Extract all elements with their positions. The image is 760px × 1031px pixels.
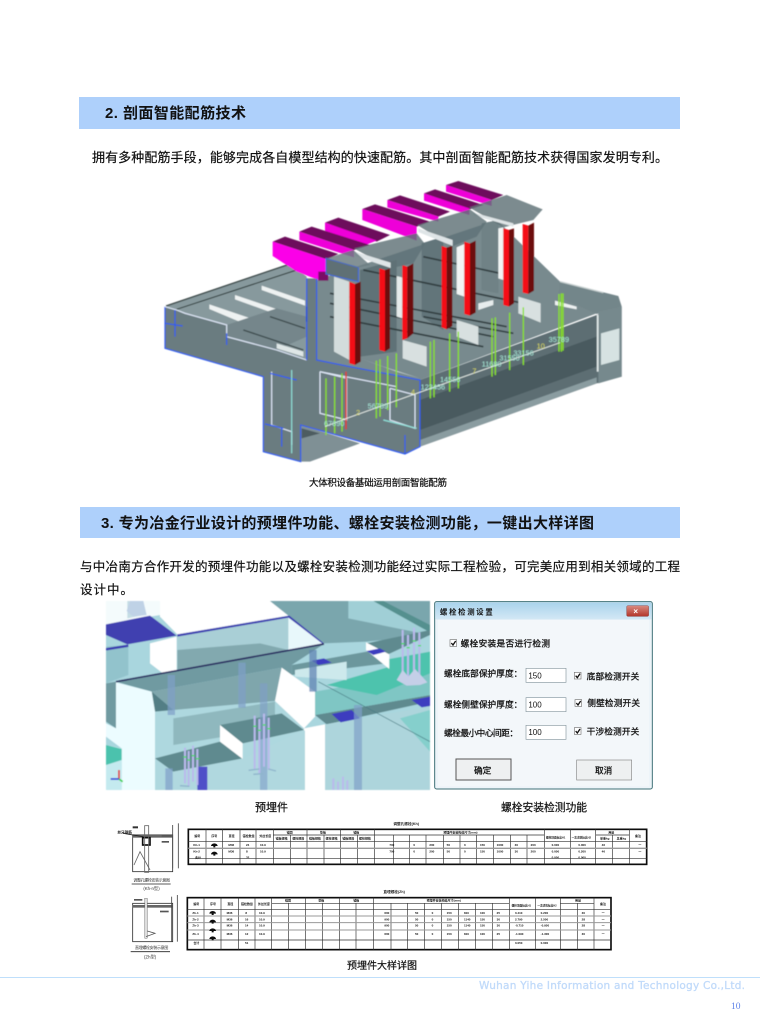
table 2: 810 — [464, 932, 469, 936]
section sketch 1: 丝牙钢筋 — [117, 830, 132, 835]
right exterior face — [301, 307, 622, 462]
table 2: 螺栓顶面标高H1 — [512, 903, 532, 907]
table 2: 0 — [432, 924, 434, 928]
table 1: 46 — [602, 850, 605, 854]
table 1: 编号 — [194, 833, 200, 838]
table 1: 0.000 — [578, 856, 586, 860]
button: confirm: 确定 — [474, 764, 492, 775]
table 2: 14 — [245, 924, 249, 928]
table 2: 50 — [415, 911, 419, 915]
table 2: 50 — [415, 932, 419, 936]
table 1: 200 — [531, 843, 536, 847]
stepped ledges — [155, 630, 430, 790]
table 1: 预埋件安装构造尺寸(mm) — [443, 830, 477, 835]
table 2: 一 — [602, 917, 605, 921]
table 1: 一次浇筑标高H2 — [572, 835, 592, 839]
table 2: Zh-1 — [192, 911, 199, 915]
table 2: 100 — [480, 932, 485, 936]
table 2: 28 — [582, 917, 585, 921]
left floor area — [165, 264, 307, 360]
table 1: 0.200 — [578, 850, 586, 854]
table 2: 30 — [497, 917, 500, 921]
table 2: 用量 — [575, 898, 581, 903]
table 2 — [187, 889, 611, 950]
table 2: 50 — [415, 917, 419, 921]
table 2: 一 — [602, 932, 605, 936]
setting row: min spacing: 干涉检测开关 — [587, 725, 640, 736]
table 2: 150 — [447, 911, 452, 915]
table 2: 50 — [415, 924, 419, 928]
table 1: 30 — [515, 850, 518, 854]
table 1: 螺栓顶面标高H1 — [546, 835, 566, 839]
setting row: bottom cover — [444, 668, 640, 682]
table 2: 外丝长度 — [258, 901, 270, 906]
table 1: 垫板 — [320, 830, 326, 835]
table 2: -1.300 — [541, 932, 549, 936]
table 1: 总重kg — [617, 835, 626, 840]
table 1: 200 — [429, 843, 435, 847]
table 1: 1000 — [497, 850, 504, 854]
caption: bolt detection: 螺栓安装检测功能 — [501, 800, 587, 814]
intro text: section 2: 拥有多种配筋手段，能够完成各自模型结构的快速配筋。其中剖面智能配筋技术获得国家发明专利。 — [92, 150, 668, 165]
bar dimension labels: 56789 — [368, 402, 388, 411]
table 1: 0 — [413, 850, 415, 854]
table 2: 编号 — [193, 901, 199, 906]
footer: rule and company name: Wuhan Yihe Information and Technology Co.,Ltd. — [479, 980, 745, 992]
table 2: 10.9 — [259, 911, 265, 915]
light columns — [334, 227, 541, 367]
bar dimension labels: 123456 — [421, 382, 445, 391]
dialog title bar: × — [633, 607, 638, 616]
table 2: 锚栓数量 — [241, 901, 253, 906]
table 1: 调整孔螺栓(Kh) — [393, 821, 420, 826]
table 1: 200 — [429, 850, 435, 854]
table 1: 700 — [389, 843, 395, 847]
table 1: 10.9 — [260, 850, 266, 854]
table 2: -0.710 — [515, 924, 524, 928]
button: cancel: 取消 — [595, 764, 613, 775]
table 2: 30 — [582, 911, 585, 915]
table 2: 150 — [447, 924, 452, 928]
table 2: 600 — [384, 932, 390, 936]
table 2: -1.090 — [515, 932, 524, 936]
button: cancel — [577, 760, 632, 780]
section sketch 1: (Kh-n型) — [143, 885, 160, 891]
table 2: 0 — [432, 911, 434, 915]
table 2: 8 — [245, 911, 247, 915]
table 2: 600 — [384, 911, 390, 915]
3D model: foundation with sectional reinforcement — [165, 181, 622, 462]
red columns — [349, 223, 534, 365]
setting row: side cover: 螺栓侧壁保护厚度： — [444, 699, 522, 710]
table 1: 150 — [480, 843, 485, 847]
table 2: 一 — [602, 924, 605, 928]
table 1: 0 — [413, 843, 415, 847]
dialog: bolt detection settings — [435, 602, 652, 789]
table 2: 900 — [384, 924, 390, 928]
table 2: 0.200 — [541, 911, 548, 915]
table 2: 1140 — [464, 917, 471, 921]
table 2: 一 — [602, 911, 605, 915]
table 2: 150 — [447, 917, 452, 921]
table 1: 0.000 — [552, 856, 559, 860]
setting row: min spacing — [444, 725, 640, 739]
bar dimension labels — [324, 335, 569, 428]
bar dimension labels: 14556 — [440, 375, 460, 384]
table 2: 2.790 — [515, 917, 523, 921]
section sketch 2: 直埋螺栓安装示意图 — [135, 944, 168, 950]
table 1: M36 — [228, 843, 234, 847]
upper background surfaces — [106, 601, 430, 683]
table 2: 30 — [497, 924, 500, 928]
bar dimension labels: 35789 — [549, 335, 569, 344]
detect enable checkbox: 螺栓安装是否进行检测 — [461, 638, 550, 649]
table 2: 一次浇筑标高H2 — [537, 903, 557, 907]
section cut face — [165, 278, 420, 462]
table 2: 直径 — [227, 901, 233, 906]
table 1: 32 — [246, 856, 250, 860]
bar dimension labels: 10 — [537, 342, 545, 351]
table 1: M36 — [228, 850, 234, 854]
table 2: 10.9 — [259, 924, 265, 928]
table 2: 12 — [245, 932, 249, 936]
table 1: 锚板 — [353, 830, 359, 835]
table 1: 外丝长度 — [259, 833, 271, 838]
table 1: 50 — [447, 843, 450, 847]
table 2: 合计 — [193, 940, 199, 945]
table 2: 锚固 — [285, 898, 291, 903]
magenta beams — [273, 181, 503, 281]
table 2: M36 — [227, 911, 233, 915]
table 1: 用量 — [608, 830, 614, 835]
anchor bolts — [127, 601, 427, 790]
table 1: 备注 — [635, 833, 641, 838]
caption: embedded parts: 预埋件 — [255, 801, 288, 814]
setting row: bottom cover: 螺栓底部保护厚度： — [444, 668, 522, 679]
bar dimension labels: 2 — [356, 408, 360, 417]
table 1: 0.000 — [578, 843, 586, 847]
section sketch 2: (Zh型) — [144, 953, 157, 959]
bar dimension labels: 11680 — [482, 360, 502, 369]
table 1: 700 — [389, 850, 395, 854]
section heading band: 2 — [79, 97, 680, 129]
interior pit and back walls — [317, 220, 622, 380]
table 2: 25 — [497, 911, 500, 915]
table 2: 序号 — [210, 901, 216, 906]
table 2: 150 — [447, 932, 452, 936]
table 1: 200 — [531, 850, 536, 854]
bar dimension labels: 4 — [411, 387, 415, 396]
bolt symbols — [211, 843, 218, 856]
translucent column caps — [326, 195, 543, 282]
table 2: 28 — [582, 924, 585, 928]
table 2: 直埋螺栓(Zh) — [383, 889, 406, 894]
table 1: 30 — [515, 843, 518, 847]
table 1: 0 — [464, 850, 466, 854]
table 2: 51 — [245, 941, 249, 945]
table 2: M36 — [227, 917, 233, 921]
page number: 10 — [731, 1002, 741, 1012]
3D view: embedded parts — [106, 601, 430, 790]
caption: model: 大体积设备基础运用剖面智能配筋 — [309, 477, 447, 489]
table 2: 10.9 — [259, 917, 265, 921]
table 2: 100 — [480, 911, 485, 915]
button: confirm — [456, 759, 511, 780]
axis indicator — [111, 770, 123, 782]
table 1: 0 — [464, 843, 466, 847]
section heading band: 3 — [80, 507, 680, 538]
table 1: 0.000 — [552, 850, 559, 854]
table 2: 0 — [432, 917, 434, 921]
section heading band: 2: 2. 剖面智能配筋技术 — [105, 104, 246, 122]
table 1: 1000 — [497, 843, 504, 847]
table 2: 0.410 — [515, 911, 523, 915]
setting row: side cover: 100 — [528, 701, 542, 710]
table 1: 序号 — [211, 833, 217, 838]
setting row: side cover — [444, 697, 640, 712]
table 1 — [188, 821, 647, 864]
setting row: bottom cover: 150 — [528, 671, 542, 680]
table 1: 24 — [246, 843, 250, 847]
table 2: 900 — [384, 917, 390, 921]
table 1: 直径 — [229, 833, 235, 838]
table 1: 150 — [480, 850, 485, 854]
blue section outline — [165, 278, 420, 462]
table 1: 锚板规格 — [276, 835, 288, 840]
intro text: section 3 — [80, 559, 680, 597]
section sketch 2 — [131, 895, 177, 959]
table 2: 2.500 — [541, 917, 548, 921]
table 2: M36 — [227, 924, 233, 928]
table 2: -0.950 — [541, 924, 549, 928]
table 1: 10.9 — [260, 843, 266, 847]
table 2: Zh-2 — [192, 917, 199, 921]
section heading band: 3: 3. 专为冶金行业设计的预埋件功能、螺栓安装检测功能，一键出大样详图 — [101, 514, 594, 532]
table 1: Kh-1 — [193, 843, 200, 847]
setting row: min spacing: 螺栓最小中心间距： — [444, 727, 518, 738]
table 1: 46 — [602, 843, 605, 847]
table 2: 10.9 — [259, 932, 265, 936]
section sketch 1 — [117, 823, 178, 891]
section sketch 1: 调整孔螺栓安装示意图 — [133, 876, 170, 882]
intro text: section 3: 与中冶南方合作开发的预埋件功能以及螺栓安装检测功能经过实际工程检验，可完美应用到相关领域的工程 — [80, 559, 680, 574]
setting row: min spacing: 100 — [528, 728, 542, 737]
dialog title bar: 螺栓检测设置 — [440, 607, 493, 616]
setting row: side cover: 侧壁检测开关 — [587, 697, 640, 708]
setting row: bottom cover: 底部检测开关 — [587, 670, 640, 681]
detail drawings and tables — [117, 821, 647, 959]
table 2: 150 — [480, 917, 485, 921]
table 2: 25 — [497, 932, 500, 936]
table 1: 0.000 — [552, 843, 559, 847]
bar dimension labels: 7 — [472, 366, 476, 375]
intro text: section 3: 设计中。 — [80, 582, 133, 597]
table 2: 810 — [464, 911, 469, 915]
bar dimension labels: 33156 — [513, 348, 534, 357]
dialog title bar — [435, 602, 652, 620]
table 1: 50 — [447, 850, 450, 854]
table 1: 8 — [246, 850, 248, 854]
table 2: 垫板 — [318, 898, 324, 903]
bar dimension labels: 31550 — [499, 354, 520, 363]
bar dimension labels: 67890 — [324, 419, 344, 428]
table 1: 锚栓数量 — [243, 833, 255, 838]
table 2: Zh-4 — [192, 932, 199, 936]
table 1: 锚板规格 — [342, 835, 354, 840]
table 1: 螺栓规格 — [326, 835, 338, 840]
table 2: 锚板 — [353, 898, 359, 903]
large foreground walls — [106, 644, 325, 790]
table 2: Zh-3 — [192, 924, 199, 928]
table 1: 一 — [638, 843, 641, 847]
caption: embedded part details: 预埋件大样详图 — [347, 959, 417, 972]
table 2: 预埋件安装构造尺寸(mm) — [427, 898, 461, 903]
table 2: 1140 — [464, 924, 471, 928]
table 2: 备注 — [600, 901, 606, 906]
table 1: 螺栓规格 — [292, 835, 304, 840]
table 2: 0.000 — [541, 941, 548, 945]
table 2: 150 — [480, 924, 485, 928]
reinforcement bars — [325, 293, 563, 435]
table 1: 单重kg — [600, 835, 610, 840]
table 1: 锚板规格 — [309, 835, 321, 840]
table 2: 30 — [582, 932, 585, 936]
table 1: 螺栓规格 — [359, 835, 371, 840]
table 1: Kh-2 — [193, 850, 200, 854]
table 2: M36 — [227, 932, 233, 936]
table 2: 0.050 — [515, 941, 523, 945]
table 2: 16 — [245, 917, 249, 921]
table 1: 一 — [638, 850, 641, 854]
table 1: 锚固 — [287, 830, 293, 835]
table 2: 0 — [432, 932, 434, 936]
table 1: 合计 — [195, 855, 201, 860]
